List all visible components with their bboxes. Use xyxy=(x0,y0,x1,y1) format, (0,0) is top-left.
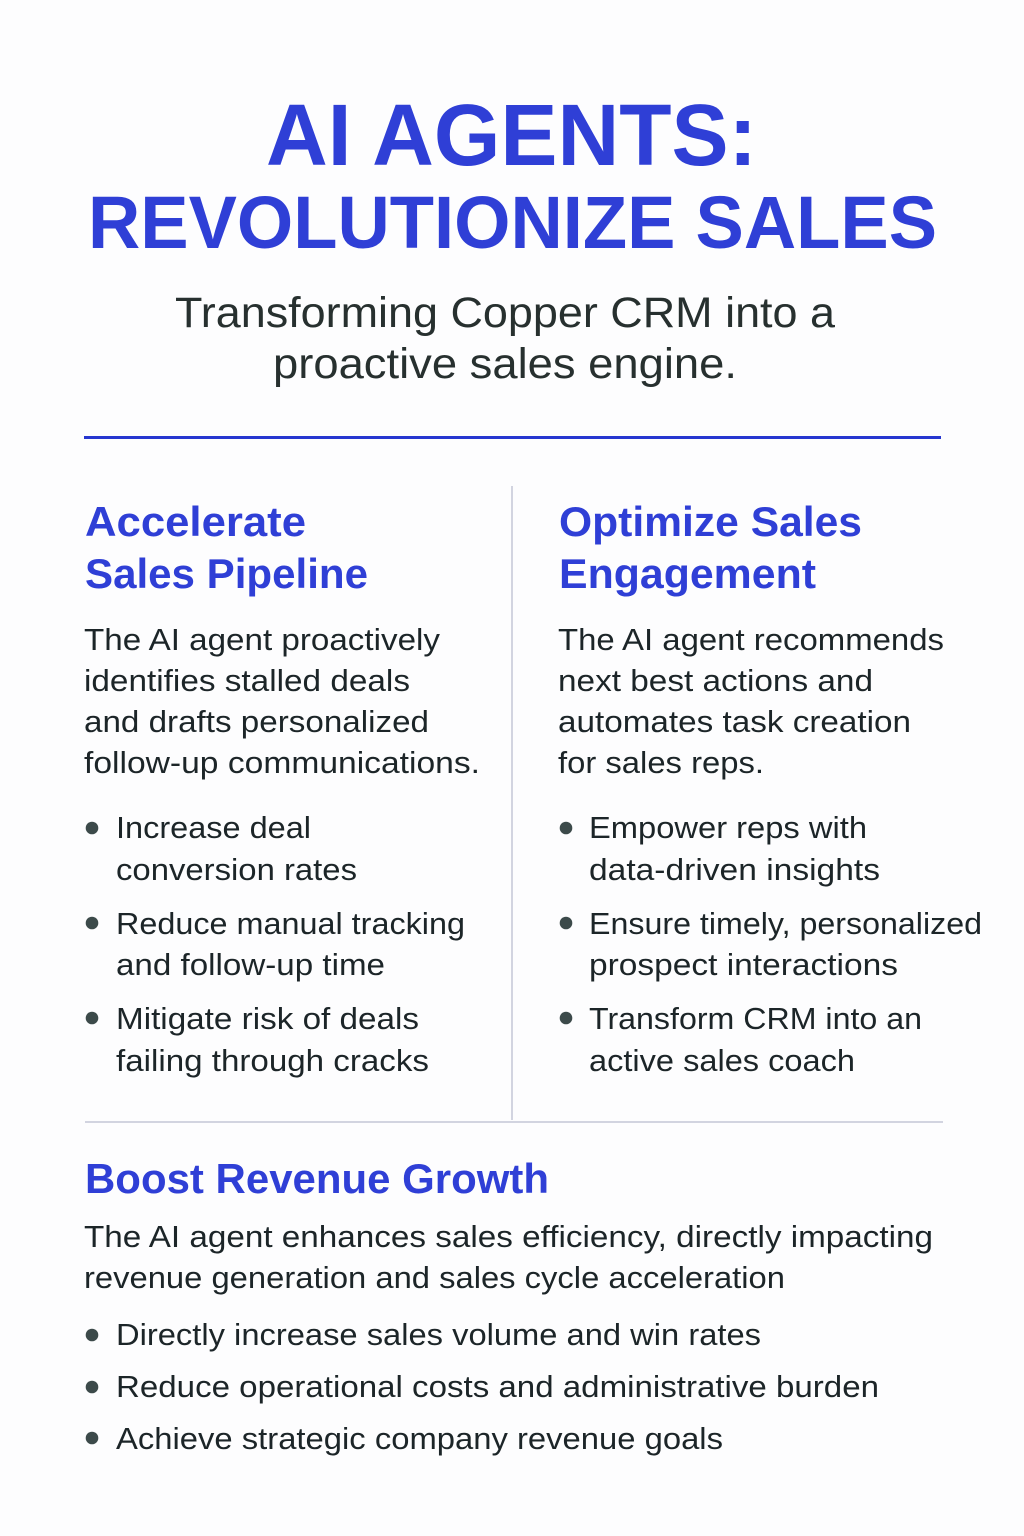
subtitle: proactive sales engine. xyxy=(273,340,737,388)
bullet list: pipeline benefits: failing through cracks xyxy=(116,1043,429,1078)
heading: accelerate sales pipeline: Accelerate xyxy=(85,498,306,545)
bullet list: pipeline benefits: and follow-up time xyxy=(116,947,385,982)
bullet list: engagement benefits: Empower reps with xyxy=(589,810,867,845)
panel: boost revenue growth xyxy=(84,1155,933,1456)
bullet list: revenue benefits: Achieve strategic company revenue goals xyxy=(116,1421,723,1456)
text block: engagement description: for sales reps. xyxy=(558,745,764,780)
bullet list: pipeline benefits: Reduce manual tracking xyxy=(116,906,465,941)
text block: engagement description: The AI agent recommends xyxy=(558,622,944,657)
heading: accelerate sales pipeline xyxy=(85,498,368,597)
title: AI AGENTS: xyxy=(266,87,757,184)
text block: pipeline description: follow-up communications. xyxy=(84,745,480,780)
text block: pipeline description xyxy=(84,622,480,780)
bullet list: revenue benefits xyxy=(86,1317,879,1456)
panel: optimize sales engagement xyxy=(558,498,982,1078)
text block: engagement description: automates task creation xyxy=(558,704,911,739)
heading: optimize sales engagement xyxy=(559,498,862,597)
bullet list: engagement benefits xyxy=(560,810,982,1078)
heading: boost revenue growth: Boost Revenue Growth xyxy=(85,1155,549,1202)
bullet list: engagement benefits: Ensure timely, personalized xyxy=(589,906,982,941)
text block: pipeline description: The AI agent proactively xyxy=(84,622,441,657)
text block: revenue description: The AI agent enhances sales efficiency, directly impacting xyxy=(84,1219,933,1254)
subtitle: Transforming Copper CRM into a xyxy=(175,289,835,337)
bullet list: engagement benefits: Transform CRM into an xyxy=(589,1001,922,1036)
heading: optimize sales engagement: Engagement xyxy=(559,550,816,597)
bullet list: pipeline benefits: conversion rates xyxy=(116,852,357,887)
bullet list: pipeline benefits: Mitigate risk of deals xyxy=(116,1001,419,1036)
subtitle xyxy=(175,289,835,388)
bullet list: pipeline benefits xyxy=(86,810,465,1078)
panel: accelerate sales pipeline xyxy=(84,498,480,1078)
text block: engagement description: next best actions and xyxy=(558,663,873,698)
text block: pipeline description: and drafts personalized xyxy=(84,704,429,739)
bullet list: revenue benefits: Reduce operational costs and administrative burden xyxy=(116,1369,879,1404)
bullet list: revenue benefits: Directly increase sales volume and win rates xyxy=(116,1317,761,1352)
text block: revenue description: revenue generation and sales cycle acceleration xyxy=(84,1260,785,1295)
text block: revenue description xyxy=(84,1219,933,1295)
text block: pipeline description: identifies stalled deals xyxy=(84,663,410,698)
bullet list: pipeline benefits: Increase deal xyxy=(116,810,311,845)
bullet list: engagement benefits: data-driven insights xyxy=(589,852,880,887)
heading: optimize sales engagement: Optimize Sales xyxy=(559,498,862,545)
bullet list: engagement benefits: active sales coach xyxy=(589,1043,855,1078)
text block: engagement description xyxy=(558,622,944,780)
heading: accelerate sales pipeline: Sales Pipeline xyxy=(85,550,368,597)
title xyxy=(88,87,937,264)
title: REVOLUTIONIZE SALES xyxy=(88,181,937,264)
bullet list: engagement benefits: prospect interactions xyxy=(589,947,898,982)
